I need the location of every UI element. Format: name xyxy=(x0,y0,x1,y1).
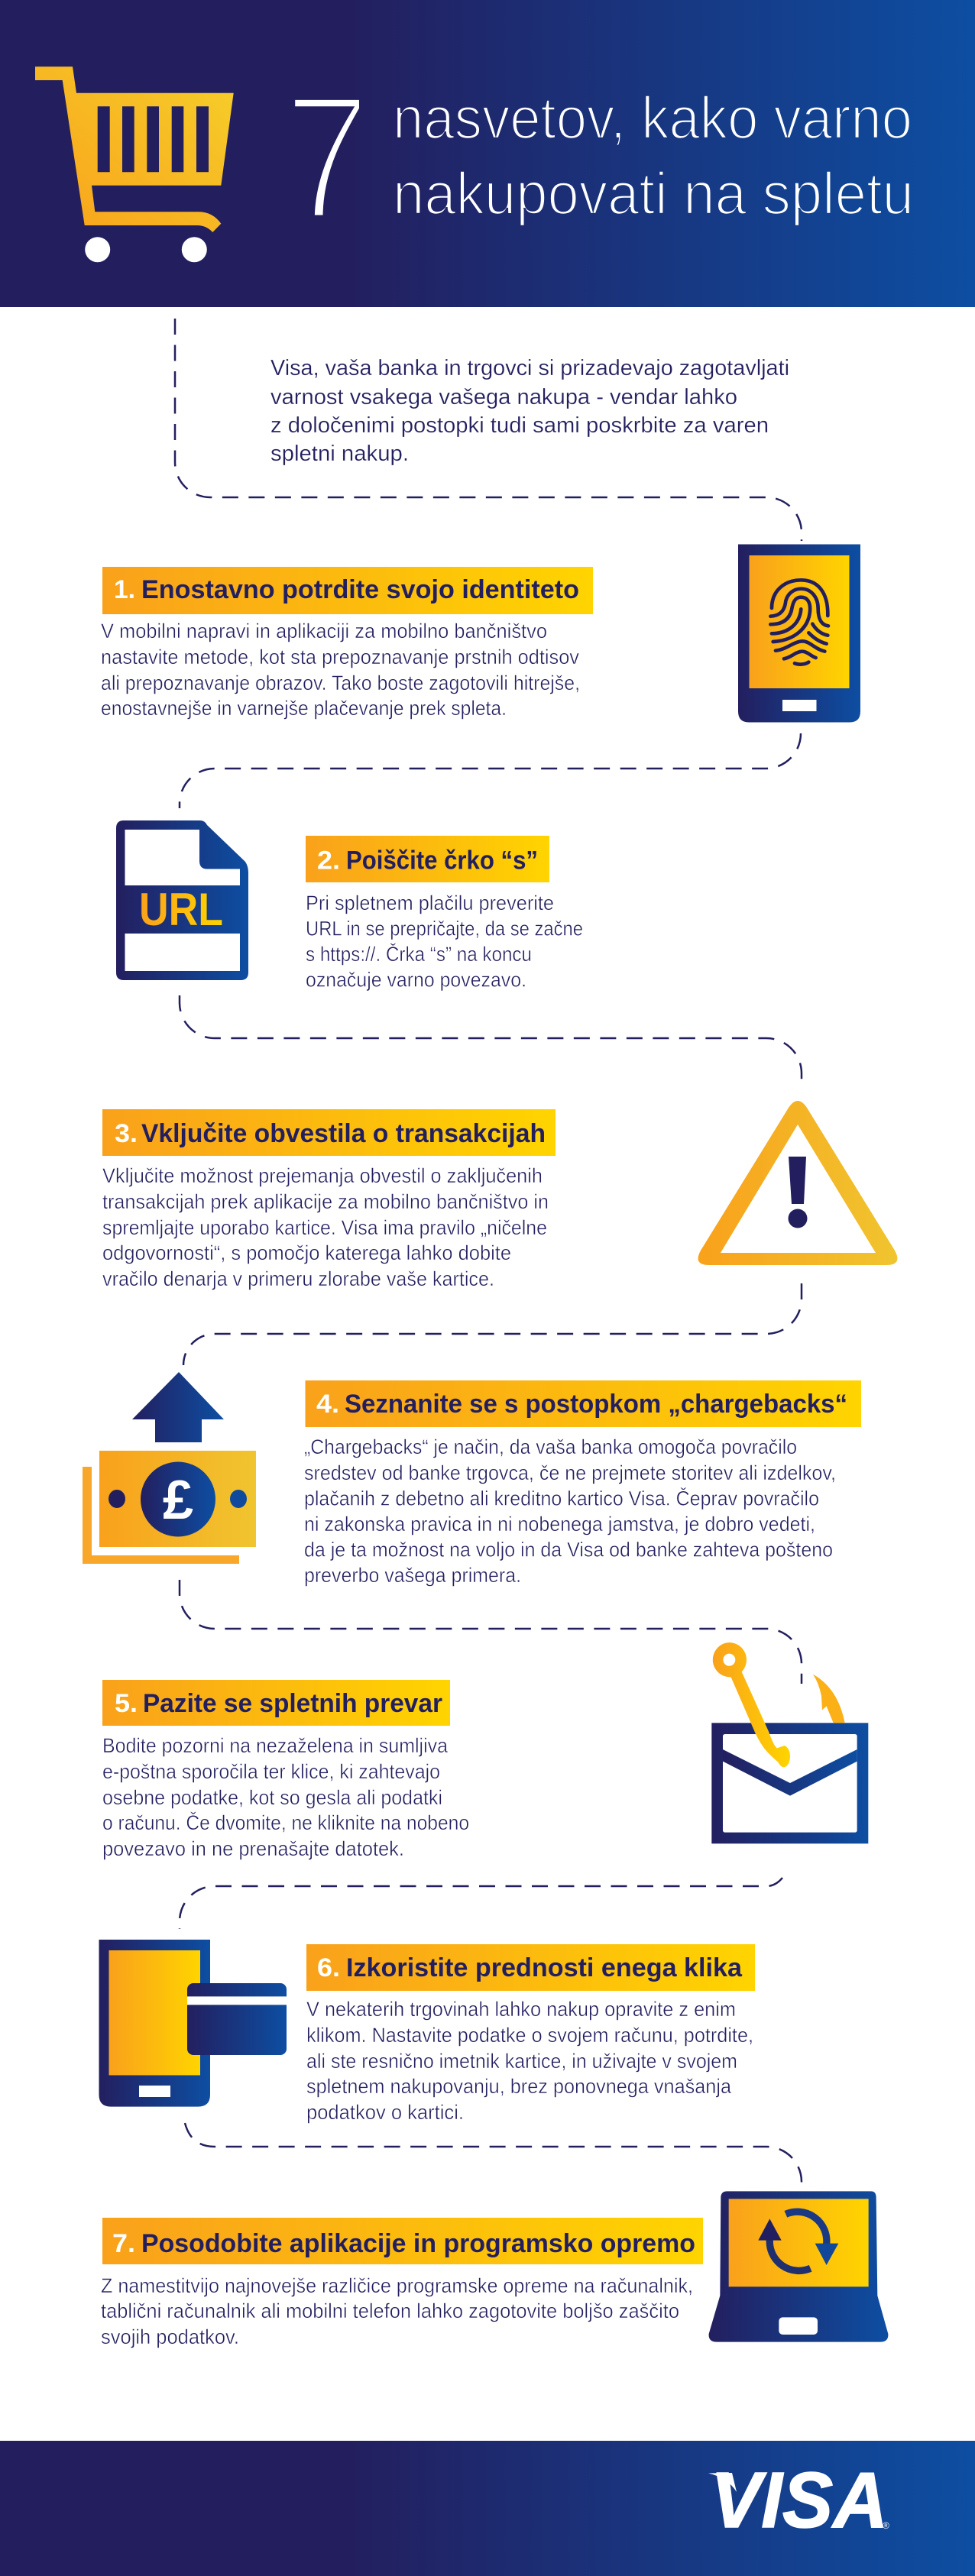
heading banner 4: Seznanite se s postopkom „chargebacks“ xyxy=(345,1390,847,1419)
heading banner 3 xyxy=(102,1109,556,1156)
panel: tip 4 xyxy=(83,1372,861,1587)
body text 3: odgovornosti“, s pomočjo katerega lahko dobite xyxy=(102,1241,511,1264)
body text 2: URL in se prepričajte, da se začne xyxy=(306,917,583,940)
title text: nakupovati na spletu xyxy=(393,160,914,227)
heading banner 3: Vključite obvestila o transakcijah xyxy=(141,1119,546,1148)
body text 7: svojih podatkov. xyxy=(101,2325,239,2348)
panel: tip 3 xyxy=(102,1101,897,1290)
body text 2 xyxy=(306,892,583,992)
intro text: varnost vsakega vašega nakupa - vendar lahko xyxy=(270,385,737,409)
intro text: Visa, vaša banka in trgovci si prizadevajo zagotavljati xyxy=(270,356,789,380)
heading banner 2 xyxy=(306,836,549,882)
dashed connector 2 xyxy=(180,733,801,808)
icon: banknote with up arrow: £ xyxy=(163,1470,193,1531)
body text 5: o računu. Če dvomite, ne kliknite na nobeno xyxy=(102,1811,469,1834)
title text xyxy=(393,84,914,227)
heading banner 7 xyxy=(102,2218,703,2264)
panel: tip 5 xyxy=(102,1642,868,1860)
Visa logo: VISA xyxy=(711,2456,888,2544)
body text 3: transakcijah prek aplikacije za mobilno bančništvo in xyxy=(102,1190,549,1213)
header band xyxy=(0,0,975,307)
icon: phone and payment card xyxy=(99,1940,287,2107)
body text 6: ali ste resnično imetnik kartice, in uživajte v svojem xyxy=(306,2050,737,2073)
dashed connector 6 xyxy=(180,1878,782,1929)
dashed connector 3 xyxy=(180,995,802,1089)
title text: nasvetov, kako varno xyxy=(393,84,912,151)
body text 2: Pri spletnem plačilu preverite xyxy=(306,892,554,914)
panel: tip 6 xyxy=(99,1940,755,2124)
heading banner 1 xyxy=(102,567,593,614)
Visa logo: ® xyxy=(883,2520,889,2531)
body text 6 xyxy=(306,1998,753,2124)
body text 1: nastavite metode, kot sta prepoznavanje prstnih odtisov xyxy=(101,646,580,668)
heading banner 5: Pazite se spletnih prevar xyxy=(143,1689,442,1718)
body text 5: osebne podatke, kot so gesla ali podatki xyxy=(102,1786,442,1809)
heading banner 4: 4. xyxy=(316,1390,339,1419)
body text 2: označuje varno povezavo. xyxy=(306,969,526,992)
body text 5: povezavo in ne prenašajte datotek. xyxy=(102,1837,404,1860)
body text 4: preverbo vašega primera. xyxy=(304,1564,521,1587)
icon: laptop with refresh arrows xyxy=(709,2191,888,2342)
icon: warning triangle xyxy=(698,1101,897,1265)
panel: tip 1 xyxy=(101,544,860,723)
body text 3 xyxy=(102,1164,549,1290)
body text 4: plačanih z debetno ali kreditno kartico Visa. Čeprav povračilo xyxy=(304,1487,819,1510)
body text 4: sredstev od banke trgovca, če ne prejmete storitev ali izdelkov, xyxy=(304,1461,836,1484)
dashed connector 4 xyxy=(183,1283,802,1365)
heading banner 4 xyxy=(306,1380,861,1427)
heading banner 5: 5. xyxy=(115,1689,138,1718)
icon: URL file xyxy=(116,820,248,980)
heading banner 5 xyxy=(102,1680,450,1726)
heading banner 3: 3. xyxy=(115,1119,138,1148)
body text 1: ali prepoznavanje obrazov. Tako boste zagotovili hitrejše, xyxy=(101,672,580,694)
heading banner 6 xyxy=(306,1944,755,1991)
icon: email with phishing hook xyxy=(711,1642,868,1843)
icon: shopping cart xyxy=(35,66,234,262)
intro text: z določenimi postopki tudi sami poskrbite za varen xyxy=(270,413,769,438)
body text 5 xyxy=(102,1734,469,1860)
footer band xyxy=(0,2441,975,2576)
body text 3: vračilo denarja v primeru zlorabe vaše kartice. xyxy=(102,1267,494,1290)
icon: phone with fingerprint xyxy=(738,544,860,723)
body text 6: spletnem nakupovanju, brez ponovnega vnašanja xyxy=(306,2075,731,2098)
heading banner 7: 7. xyxy=(112,2229,135,2258)
body text 6: podatkov o kartici. xyxy=(306,2101,464,2124)
title number 7: 7 xyxy=(284,59,370,257)
body text 6: klikom. Nastavite podatke o svojem računu, potrdite, xyxy=(306,2024,753,2047)
body text 4 xyxy=(304,1435,836,1587)
heading banner 2: 2. xyxy=(317,846,340,875)
dashed connector 1 xyxy=(175,319,802,541)
body text 4: ni zakonska pravica in ni nobenega jamstva, je dobro vedeti, xyxy=(304,1513,815,1536)
heading banner 1: 1. xyxy=(114,575,135,604)
body text 5: e-poštna sporočila ter klice, ki zahtevajo xyxy=(102,1760,440,1783)
dashed connector 7 xyxy=(185,2123,802,2191)
panel: tip 7 xyxy=(101,2191,888,2348)
body text 3: Vključite možnost prejemanja obvestil o zaključenih xyxy=(102,1164,543,1187)
body text 6: V nekaterih trgovinah lahko nakup opravite z enim xyxy=(306,1998,736,2021)
body text 7 xyxy=(101,2274,693,2348)
icon: URL file: URL xyxy=(139,884,223,935)
heading banner 6: 6. xyxy=(317,1953,340,1982)
body text 2: s https://. Črka “s” na koncu xyxy=(306,943,532,966)
body text 3: spremljajte uporabo kartice. Visa ima pravilo „ničelne xyxy=(102,1216,547,1239)
body text 1: V mobilni napravi in aplikaciji za mobilno bančništvo xyxy=(101,620,547,642)
body text 1: enostavnejše in varnejše plačevanje prek spleta. xyxy=(101,697,507,720)
heading banner 7: Posodobite aplikacije in programsko opremo xyxy=(141,2229,695,2258)
body text 1 xyxy=(101,620,580,720)
icon: banknote with up arrow xyxy=(83,1372,256,1564)
heading banner 6: Izkoristite prednosti enega klika xyxy=(346,1953,743,1982)
body text 7: Z namestitvijo najnovejše različice programske opreme na računalnik, xyxy=(101,2274,693,2297)
heading banner 2: Poiščite črko “s” xyxy=(346,846,538,875)
panel: tip 2 xyxy=(116,820,583,992)
body text 7: tablični računalnik ali mobilni telefon lahko zagotovite boljšo zaščito xyxy=(101,2299,679,2322)
dashed connector 5 xyxy=(180,1580,802,1684)
body text 5: Bodite pozorni na nezaželena in sumljiva xyxy=(102,1734,448,1757)
body text 4: „Chargebacks“ je način, da vaša banka omogoča povračilo xyxy=(304,1435,797,1458)
intro text: spletni nakup. xyxy=(270,442,409,466)
intro text xyxy=(270,356,789,466)
body text 4: da je ta možnost na voljo in da Visa od banke zahteva pošteno xyxy=(304,1539,833,1561)
heading banner 1: Enostavno potrdite svojo identiteto xyxy=(141,575,579,604)
